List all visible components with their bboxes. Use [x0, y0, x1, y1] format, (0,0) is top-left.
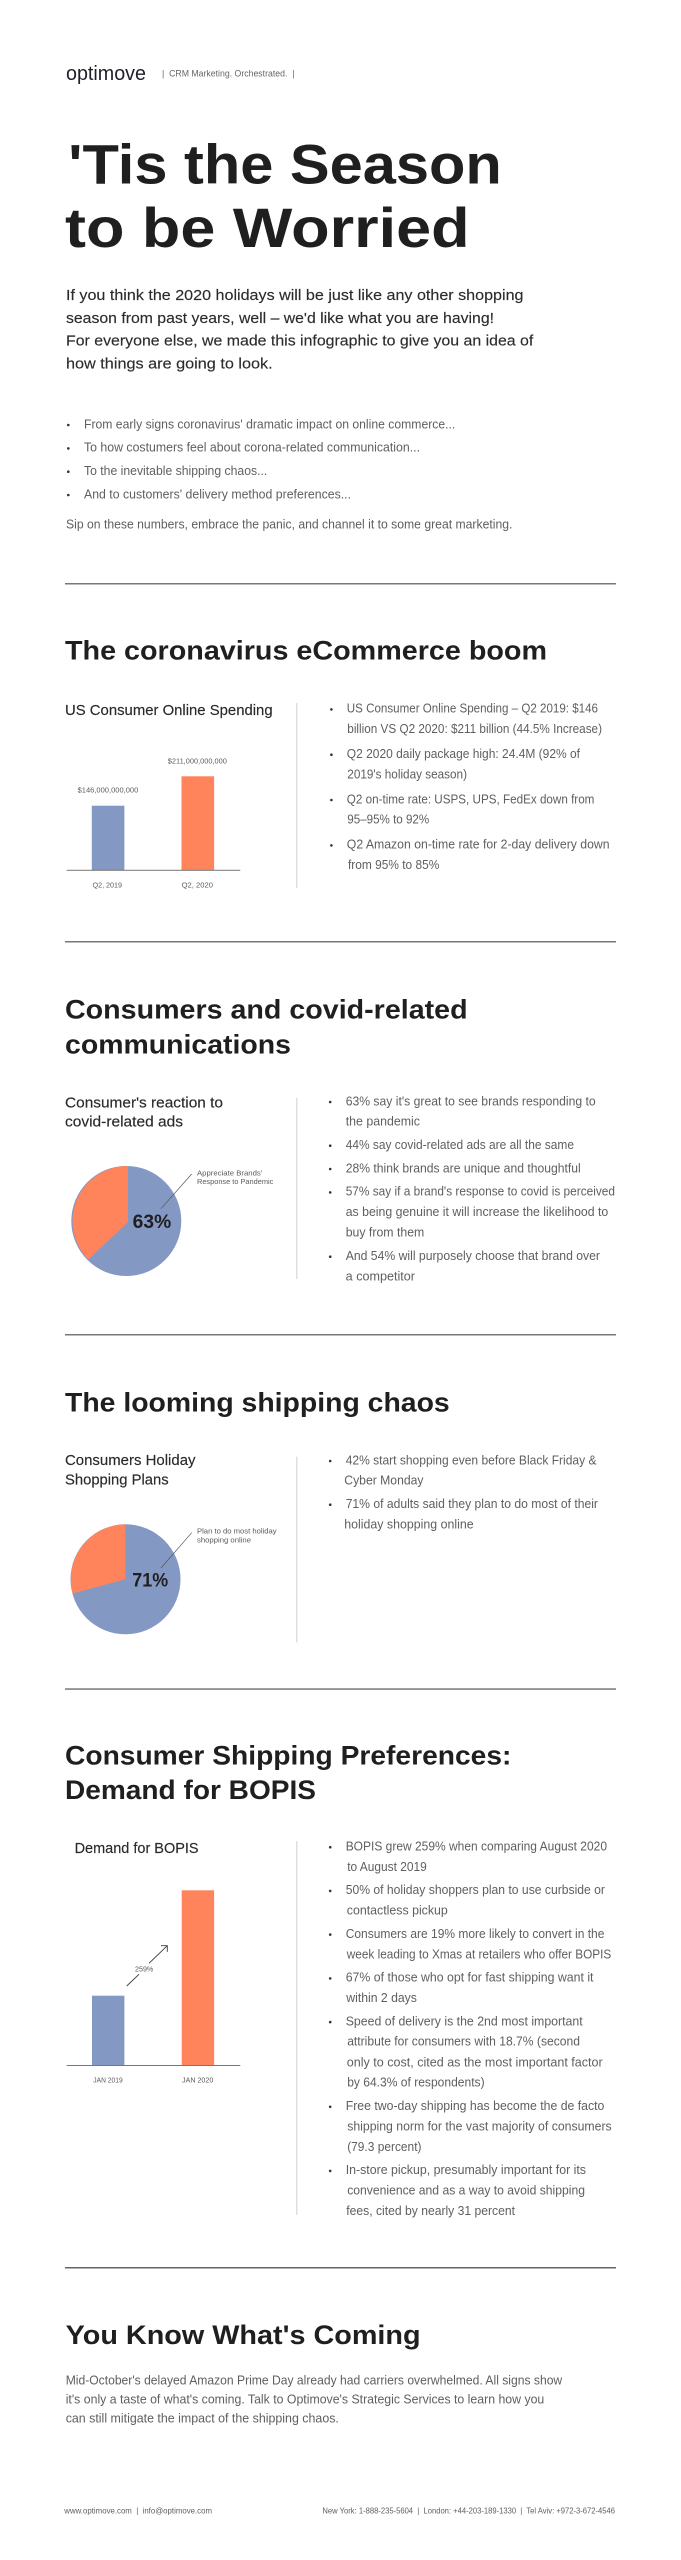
- intro bullet list: To how costumers feel about corona-related communication...: [84, 441, 420, 455]
- pie chart: 63%: [71, 1166, 181, 1276]
- intro paragraph: how things are going to look.: [66, 355, 273, 372]
- heading: consumer shipping preferences: [65, 1741, 511, 1805]
- closing paragraph: [66, 2373, 563, 2425]
- pie value: 63%: [133, 1212, 171, 1233]
- intro paragraph: For everyone else, we made this infographic to give you an idea of: [66, 333, 534, 350]
- bar: Q2 2020: [182, 776, 214, 870]
- panel: BOPIS bullets: by 64.3% of respondents): [347, 2076, 485, 2090]
- panel: BOPIS bullets: within 2 days: [345, 1991, 417, 2005]
- closing intro line: Sip on these numbers, embrace the panic, and channel it to some great marketing.: [66, 517, 512, 531]
- panel: eCommerce boom bullets: billion VS Q2 2020: $211 billion (44.5% Increase): [347, 722, 602, 736]
- closing paragraph: it's only a taste of what's coming. Talk to Optimove's Strategic Services to learn how you: [66, 2392, 544, 2406]
- title: [65, 132, 502, 259]
- panel: eCommerce boom bullets: Q2 on-time rate: USPS, UPS, FedEx down from: [347, 792, 594, 806]
- footer: phone numbers: New York: 1-888-235-5604 | London: +44-203-189-1330 | Tel Aviv: +972-3-672-4546: [322, 2507, 616, 2516]
- intro bullet list: And to customers' delivery method preferences...: [84, 487, 351, 501]
- panel: BOPIS bullets: Consumers are 19% more likely to convert in the: [346, 1927, 604, 1941]
- axis labels: [93, 2075, 213, 2084]
- panel: eCommerce boom bullets: from 95% to 85%: [348, 858, 439, 872]
- footer: website and email: www.optimove.com | info@optimove.com: [63, 2507, 212, 2516]
- panel: eCommerce boom bullets: Q2 2020 daily package high: 24.4M (92% of: [347, 747, 580, 761]
- panel: consumers holiday shopping plans chart: [65, 1453, 277, 1634]
- panel: shipping chaos bullets: [329, 1453, 598, 1531]
- panel: eCommerce boom bullets: 2019's holiday season): [347, 767, 467, 781]
- growth label: 259%: [135, 1964, 154, 1973]
- chart title: [65, 1095, 223, 1131]
- panel: BOPIS bullets: [329, 1840, 612, 2218]
- panel: eCommerce boom bullets: Q2 Amazon on-time rate for 2-day delivery down: [347, 838, 610, 852]
- heading: the looming shipping chaos: The looming shipping chaos: [65, 1388, 450, 1418]
- leader line: [161, 1174, 192, 1209]
- panel: eCommerce boom bullets: [330, 702, 610, 872]
- axis labels: JAN 2020: [182, 2075, 213, 2084]
- panel: shipping chaos bullets: holiday shopping online: [344, 1517, 474, 1531]
- pie callout label: [197, 1527, 277, 1544]
- heading: consumer shipping preferences: Consumer Shipping Preferences:: [65, 1741, 511, 1771]
- heading: coronavirus eCommerce boom: The coronavirus eCommerce boom: [65, 635, 547, 665]
- panel: covid communications bullets: as being genuine it will increase the likelihood to: [346, 1205, 608, 1219]
- pie callout label: Appreciate Brands': [197, 1168, 263, 1177]
- panel: demand for BOPIS chart: [67, 1841, 240, 2084]
- panel: BOPIS bullets: 67% of those who opt for fast shipping want it: [346, 1971, 594, 1985]
- pie callout label: Response to Pandemic: [197, 1177, 274, 1186]
- panel: BOPIS bullets: attribute for consumers with 18.7% (second: [347, 2035, 580, 2049]
- title: to be Worried: [65, 196, 470, 259]
- header: logo and tagline: [66, 63, 294, 85]
- heading: you know what's coming: You Know What's Coming: [66, 2320, 421, 2350]
- heading: consumers and covid-related communications: communications: [65, 1029, 291, 1059]
- chart title: Demand for BOPIS: [75, 1841, 199, 1857]
- intro paragraph: If you think the 2020 holidays will be just like any other shopping: [66, 287, 524, 304]
- pie value: 71%: [132, 1570, 168, 1592]
- panel: shipping chaos bullets: 71% of adults said they plan to do most of their: [346, 1497, 598, 1511]
- logo wordmark: optimove: [66, 63, 146, 85]
- intro paragraph: [66, 287, 534, 372]
- panel: BOPIS bullets: convenience and as a way to avoid shipping: [347, 2184, 585, 2198]
- growth arrow: [127, 1946, 167, 1986]
- panel: BOPIS bullets: only to cost, cited as the most important factor: [347, 2055, 603, 2069]
- closing paragraph: Mid-October's delayed Amazon Prime Day already had carriers overwhelmed. All signs show: [66, 2373, 563, 2387]
- panel: covid communications bullets: [329, 1094, 615, 1283]
- panel: BOPIS bullets: (79.3 percent): [347, 2140, 422, 2154]
- panel: US consumer online spending chart: [65, 703, 273, 889]
- panel: reaction to covid-related ads chart: [65, 1095, 274, 1276]
- bar value labels: $211,000,000,000: [168, 757, 227, 766]
- panel: BOPIS bullets: fees, cited by nearly 31 percent: [346, 2204, 516, 2218]
- closing paragraph: can still mitigate the impact of the shipping chaos.: [66, 2411, 339, 2425]
- heading: consumer shipping preferences: Demand for BOPIS: [65, 1775, 316, 1805]
- bar: Q2 2019: [92, 806, 124, 870]
- panel: covid communications bullets: a competitor: [346, 1269, 415, 1283]
- panel: BOPIS bullets: week leading to Xmas at retailers who offer BOPIS: [346, 1947, 611, 1961]
- panel: BOPIS bullets: 50% of holiday shoppers plan to use curbside or: [346, 1883, 605, 1897]
- title: 'Tis the Season: [68, 132, 502, 196]
- panel: covid communications bullets: 63% say it's great to see brands responding to: [346, 1094, 596, 1108]
- panel: BOPIS bullets: shipping norm for the vast majority of consumers: [347, 2119, 612, 2133]
- panel: BOPIS bullets: Free two-day shipping has become the de facto: [346, 2099, 604, 2113]
- bar: Jan 2019: [92, 1996, 124, 2065]
- panel: covid communications bullets: the pandemic: [346, 1115, 420, 1129]
- panel: eCommerce boom bullets: 95–95% to 92%: [347, 813, 429, 827]
- intro bullet list: To the inevitable shipping chaos...: [84, 464, 267, 478]
- pie callout label: [197, 1168, 274, 1186]
- intro bullet list: [67, 417, 455, 501]
- chart title: Consumers Holiday: [65, 1453, 196, 1469]
- panel: shipping chaos bullets: 42% start shopping even before Black Friday &: [346, 1453, 597, 1467]
- chart title: [65, 1453, 196, 1489]
- panel: covid communications bullets: 28% think brands are unique and thoughtful: [346, 1161, 581, 1175]
- tagline: | CRM Marketing. Orchestrated. |: [162, 69, 294, 79]
- bar: Jan 2020: [182, 1890, 214, 2065]
- panel: covid communications bullets: And 54% will purposely choose that brand over: [346, 1249, 600, 1263]
- bar value labels: $146,000,000,000: [78, 786, 138, 795]
- bar value labels: [78, 757, 227, 889]
- bar value labels: Q2, 2020: [182, 880, 213, 889]
- panel: eCommerce boom bullets: US Consumer Online Spending – Q2 2019: $146: [347, 702, 598, 716]
- chart title: Shopping Plans: [65, 1473, 169, 1489]
- leader line: [161, 1533, 192, 1568]
- panel: covid communications bullets: 57% say if a brand's response to covid is perceived: [346, 1185, 615, 1199]
- panel: BOPIS bullets: BOPIS grew 259% when comparing August 2020: [346, 1840, 607, 1854]
- pie chart: 71%: [70, 1524, 180, 1634]
- panel: BOPIS bullets: In-store pickup, presumably important for its: [346, 2163, 586, 2177]
- intro paragraph: season from past years, well – we'd like what you are having!: [66, 310, 494, 327]
- heading: consumers and covid-related communications: [65, 994, 468, 1059]
- panel: covid communications bullets: buy from them: [346, 1226, 424, 1240]
- panel: BOPIS bullets: Speed of delivery is the 2nd most important: [346, 2014, 583, 2028]
- axis labels: JAN 2019: [93, 2075, 123, 2084]
- pie callout label: Plan to do most holiday: [197, 1527, 277, 1536]
- heading: consumers and covid-related communications: Consumers and covid-related: [65, 994, 468, 1024]
- chart title: US Consumer Online Spending: [65, 703, 273, 719]
- intro bullet list: From early signs coronavirus' dramatic impact on online commerce...: [84, 417, 455, 431]
- chart title: Consumer's reaction to: [65, 1095, 223, 1111]
- pie callout label: shopping online: [197, 1535, 251, 1544]
- chart title: covid-related ads: [65, 1115, 183, 1131]
- panel: BOPIS bullets: contactless pickup: [347, 1904, 448, 1918]
- bar value labels: Q2, 2019: [92, 880, 122, 889]
- panel: shipping chaos bullets: Cyber Monday: [344, 1474, 424, 1488]
- panel: covid communications bullets: 44% say covid-related ads are all the same: [346, 1138, 574, 1152]
- panel: BOPIS bullets: to August 2019: [347, 1860, 427, 1874]
